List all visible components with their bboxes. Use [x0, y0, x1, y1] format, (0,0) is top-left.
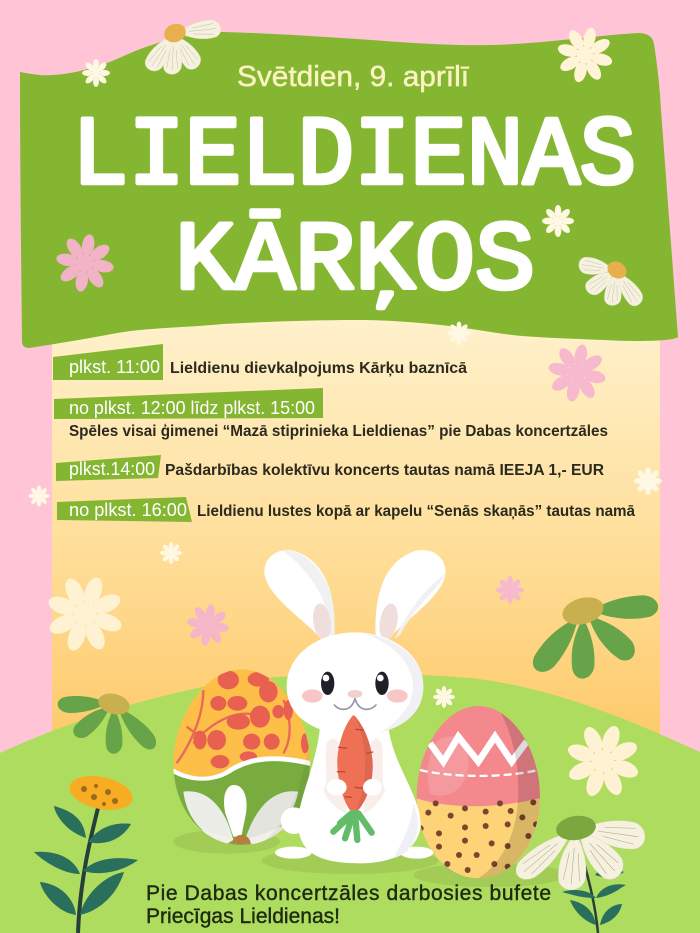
- schedule item 4: [57, 497, 635, 522]
- schedule item 2: [54, 388, 608, 440]
- footer text: [146, 882, 551, 928]
- flower: daisy on banner top: [142, 19, 222, 75]
- paws: [327, 779, 347, 796]
- bunny and eggs: [170, 550, 567, 887]
- green daisy right: [528, 593, 659, 679]
- bunny: [264, 550, 446, 863]
- small flowers on banner: [51, 21, 619, 344]
- green banner: [20, 32, 678, 348]
- patterned orange and green egg: [170, 667, 313, 850]
- body: [298, 727, 421, 863]
- cream to orange panel: [52, 320, 660, 760]
- schedule item 4: no plkst. 16:00: [69, 500, 187, 520]
- carrot leaves: [333, 813, 372, 840]
- date heading: Svētdien, 9. aprīlī: [237, 61, 469, 93]
- carrot: [337, 715, 373, 813]
- pink and yellow egg: [413, 703, 543, 880]
- green hill: [0, 674, 700, 933]
- eyes: [321, 672, 334, 695]
- scattered flowers: [28, 339, 662, 808]
- title line 2: KĀRĶOS: [175, 208, 535, 318]
- ears: [264, 550, 335, 639]
- footer text: Pie Dabas koncertzāles darbosies bufete: [146, 882, 551, 905]
- title line 1: LIELDIENAS: [72, 103, 636, 213]
- white daisy plant: [511, 813, 647, 933]
- schedule item 1: plkst. 11:00: [69, 357, 160, 377]
- nose and mouth: [348, 690, 362, 698]
- footer text: Priecīgas Lieldienas!: [146, 905, 340, 928]
- ground shadows: [173, 830, 567, 887]
- schedule item 4: Lieldienu lustes kopā ar kapelu “Senās skaņās” tautas namā: [197, 503, 635, 520]
- orange flower plant: [34, 771, 138, 933]
- schedule item 2: no plkst. 12:00 līdz plkst. 15:00: [69, 398, 315, 418]
- flower: daisy on banner right: [578, 256, 646, 309]
- schedule item 1: [53, 344, 467, 380]
- schedule item 2: Spēles visai ģimenei “Mazā stiprinieka Lieldienas” pie Dabas koncertzāles: [69, 422, 608, 440]
- cheeks: [302, 689, 323, 703]
- head: [287, 632, 423, 735]
- schedule item 3: Pašdarbības kolektīvu koncerts tautas namā IEEJA 1,- EUR: [165, 462, 604, 479]
- schedule item 1: Lieldienu dievkalpojums Kārķu baznīcā: [170, 360, 467, 377]
- green daisy left: [57, 690, 161, 754]
- schedule item 3: [56, 455, 604, 481]
- feet and tail: [275, 847, 312, 859]
- schedule item 3: plkst.14:00: [69, 459, 155, 479]
